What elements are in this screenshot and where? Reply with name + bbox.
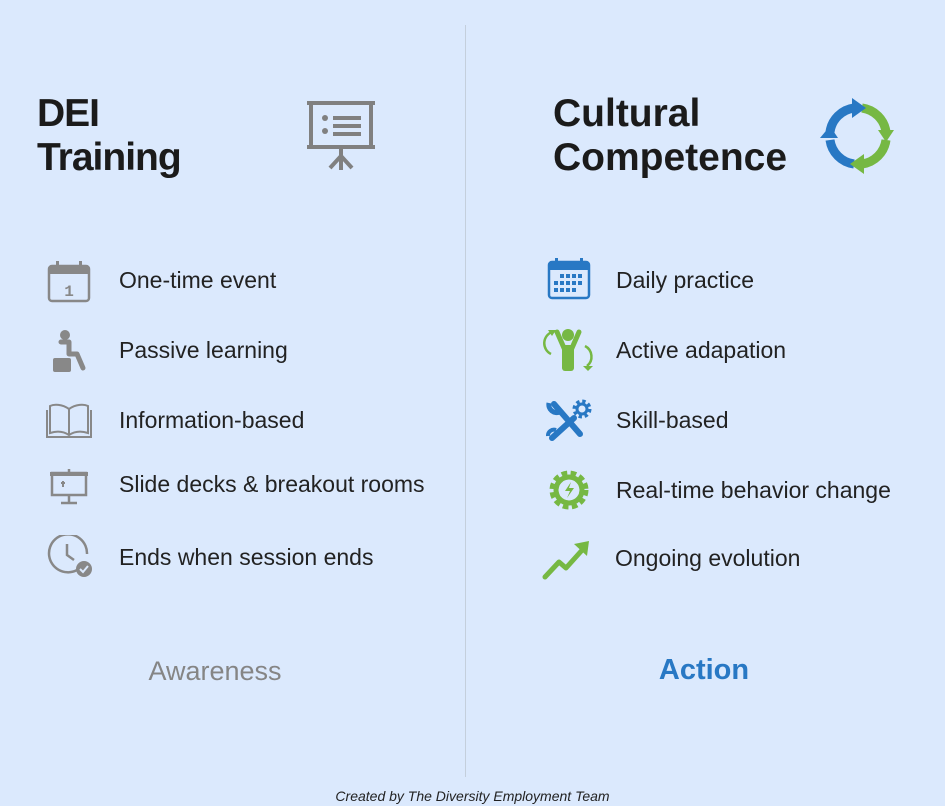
item: information-based: Information-based — [119, 407, 304, 433]
footer credit: Created by The Diversity Employment Team — [335, 788, 610, 804]
item: real-time behavior change — [550, 470, 891, 510]
title: Cultural Competence — [553, 92, 787, 179]
item: information-based — [46, 404, 304, 438]
icon: cycle arrows — [820, 98, 894, 174]
item: active adapation: Active adapation — [616, 337, 786, 363]
title: Cultural Competence: Competence — [553, 136, 787, 179]
item: ongoing evolution: Ongoing evolution — [615, 545, 800, 571]
item: real-time behavior change: Real-time behavior change — [616, 477, 891, 503]
item: slide decks — [50, 469, 425, 504]
item: slide decks: Slide decks & breakout rooms — [119, 471, 425, 497]
title: DEI Training: DEI — [37, 92, 99, 135]
item: ongoing evolution — [542, 541, 800, 580]
panel: Cultural Competence list — [542, 258, 891, 580]
title: DEI Training: Training — [37, 136, 181, 179]
item: passive learning: Passive learning — [119, 337, 288, 363]
item: one-time event: One-time event — [119, 267, 276, 293]
item: passive learning — [53, 330, 288, 372]
item: active adapation — [543, 329, 786, 371]
item: skill-based — [546, 400, 728, 441]
item: daily practice — [548, 258, 754, 300]
item: ends when session ends: Ends when session ends — [119, 544, 373, 570]
title: DEI Training — [37, 92, 181, 179]
item: one-time event — [48, 261, 276, 302]
label: Action: Action — [659, 654, 749, 686]
label: Awareness: Awareness — [148, 656, 282, 686]
divider — [465, 25, 466, 777]
panel: DEI list — [46, 261, 425, 577]
item: one-time event: 1 — [64, 283, 74, 301]
icon: presentation board — [307, 101, 375, 170]
item: ends when session ends — [48, 535, 373, 577]
item: skill-based: Skill-based — [616, 407, 728, 433]
title: Cultural Competence: Cultural — [553, 92, 700, 135]
item: daily practice: Daily practice — [616, 267, 754, 293]
